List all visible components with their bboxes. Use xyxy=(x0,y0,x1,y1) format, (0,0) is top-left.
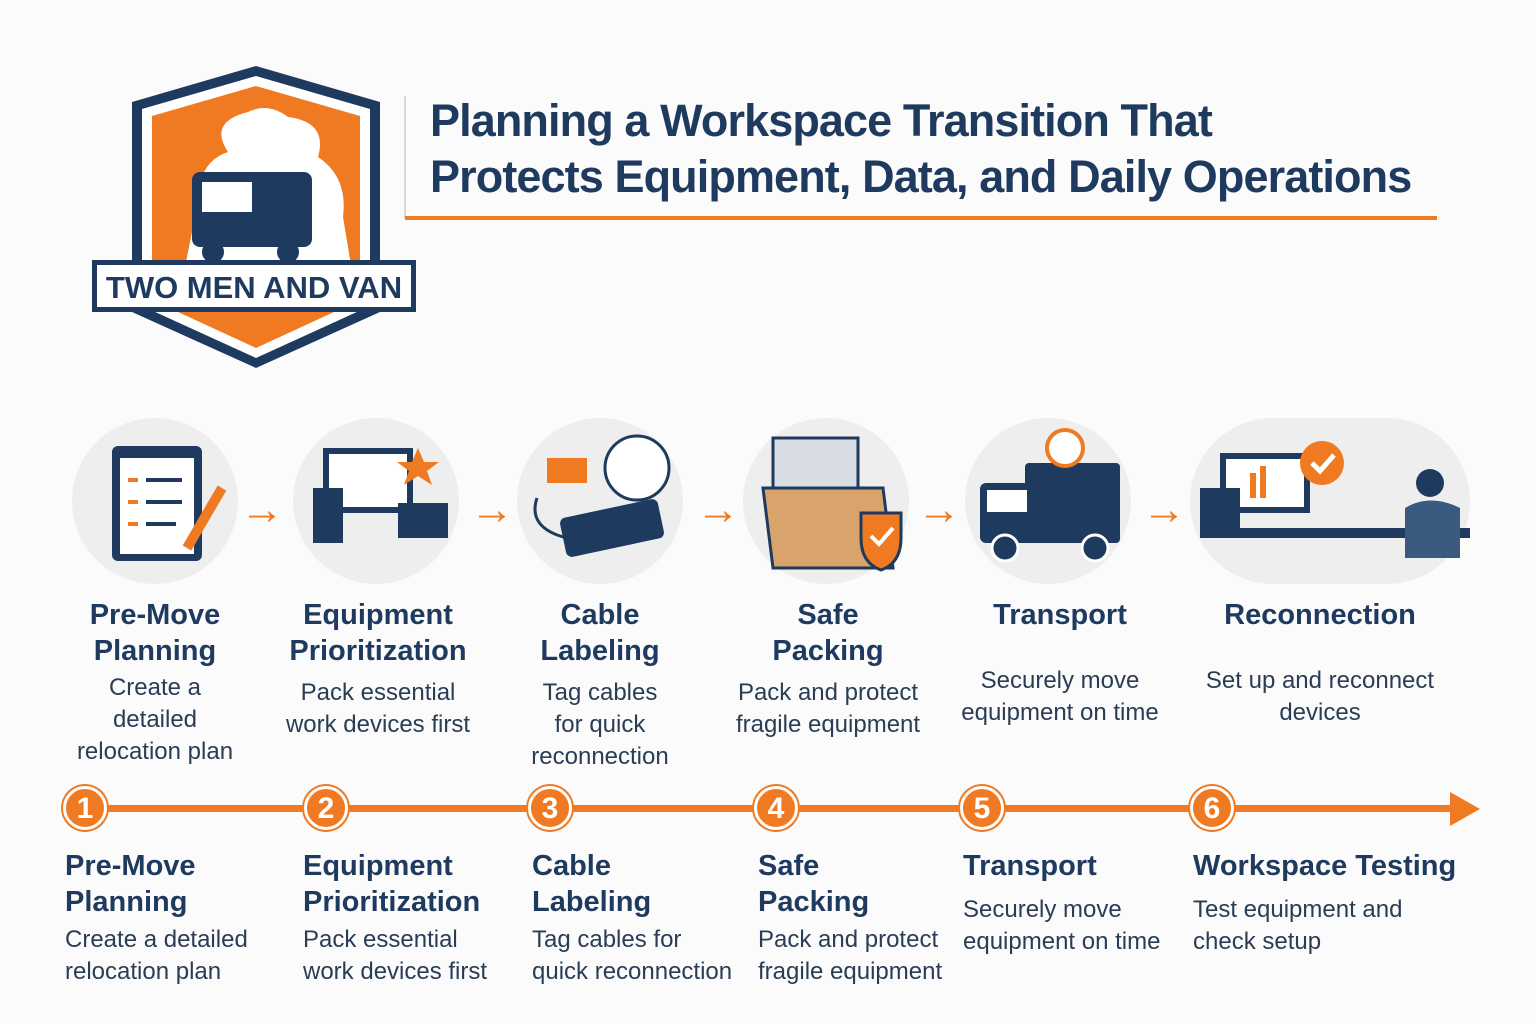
arrow: → xyxy=(917,485,961,534)
title: Protects Equipment, Data, and Daily Operations xyxy=(430,151,1411,202)
text: Tag cables for xyxy=(532,926,681,953)
text: check setup xyxy=(1193,928,1321,955)
text: Pack essential xyxy=(301,679,455,706)
arrow: → xyxy=(1142,485,1186,534)
text: Packing xyxy=(772,635,884,667)
upper step labels: Create a xyxy=(109,674,201,701)
timeline: 4 xyxy=(768,792,784,825)
title: Planning a Workspace Transition That xyxy=(430,95,1212,146)
text: Labeling xyxy=(540,635,660,667)
text: devices xyxy=(1279,699,1361,726)
text: quick reconnection xyxy=(532,958,732,985)
text: Reconnection xyxy=(1224,599,1416,631)
title xyxy=(430,95,1411,202)
text: Cable xyxy=(532,850,611,882)
arrow: → xyxy=(470,485,514,534)
upper step labels: detailed xyxy=(113,706,197,733)
lower step labels: relocation plan xyxy=(65,958,221,985)
step numbers xyxy=(63,786,107,830)
timeline: 6 xyxy=(1204,792,1220,825)
lower step labels xyxy=(65,850,248,985)
text: Pack and protect xyxy=(758,926,938,953)
text: work devices first xyxy=(286,711,470,738)
text: Safe xyxy=(758,850,819,882)
text: Safe xyxy=(797,599,859,631)
icon: clipboard xyxy=(72,418,238,584)
text: Transport xyxy=(963,850,1097,882)
text: Pack and protect xyxy=(738,679,918,706)
text: equipment on time xyxy=(961,699,1159,726)
step numbers: 1 xyxy=(77,792,93,825)
text: Labeling xyxy=(532,886,651,918)
text: Tag cables xyxy=(543,679,657,706)
icon: devices xyxy=(293,418,459,584)
icon: truck xyxy=(965,418,1131,584)
text: equipment on time xyxy=(963,928,1160,955)
text: Equipment xyxy=(303,850,453,882)
text: fragile equipment xyxy=(736,711,920,738)
text: Equipment xyxy=(303,599,453,631)
timeline: 5 xyxy=(974,792,990,825)
timeline: 2 xyxy=(318,792,334,825)
text: Securely move xyxy=(963,896,1122,923)
timeline xyxy=(61,784,1480,832)
upper step labels: Planning xyxy=(94,635,216,667)
arrow: → xyxy=(240,485,284,534)
logo: shield: TWO MEN AND VAN xyxy=(106,270,402,305)
text: fragile equipment xyxy=(758,958,942,985)
timeline: 3 xyxy=(542,792,558,825)
text: Securely move xyxy=(981,667,1139,694)
upper step labels: Pre-Move xyxy=(90,599,220,631)
upper step labels xyxy=(77,599,233,765)
text: work devices first xyxy=(303,958,487,985)
text: Workspace Testing xyxy=(1193,850,1456,882)
lower step labels: Planning xyxy=(65,886,187,918)
text: Set up and reconnect xyxy=(1206,667,1434,694)
text: Prioritization xyxy=(303,886,480,918)
icon: box xyxy=(743,418,909,584)
arrow: → xyxy=(696,485,740,534)
upper step labels: relocation plan xyxy=(77,738,233,765)
lower step labels: Create a detailed xyxy=(65,926,248,953)
logo: shield xyxy=(92,66,416,368)
text: for quick xyxy=(555,711,645,738)
text: reconnection xyxy=(531,743,669,770)
icon row xyxy=(72,418,1470,584)
text: Prioritization xyxy=(289,635,467,667)
icon: desk xyxy=(1190,418,1470,584)
text: Pack essential xyxy=(303,926,458,953)
text: Transport xyxy=(993,599,1127,631)
text: Packing xyxy=(758,886,869,918)
text: Cable xyxy=(560,599,639,631)
lower step labels: Pre-Move xyxy=(65,850,196,882)
text: Test equipment and xyxy=(1193,896,1402,923)
icon: cables xyxy=(517,418,683,584)
